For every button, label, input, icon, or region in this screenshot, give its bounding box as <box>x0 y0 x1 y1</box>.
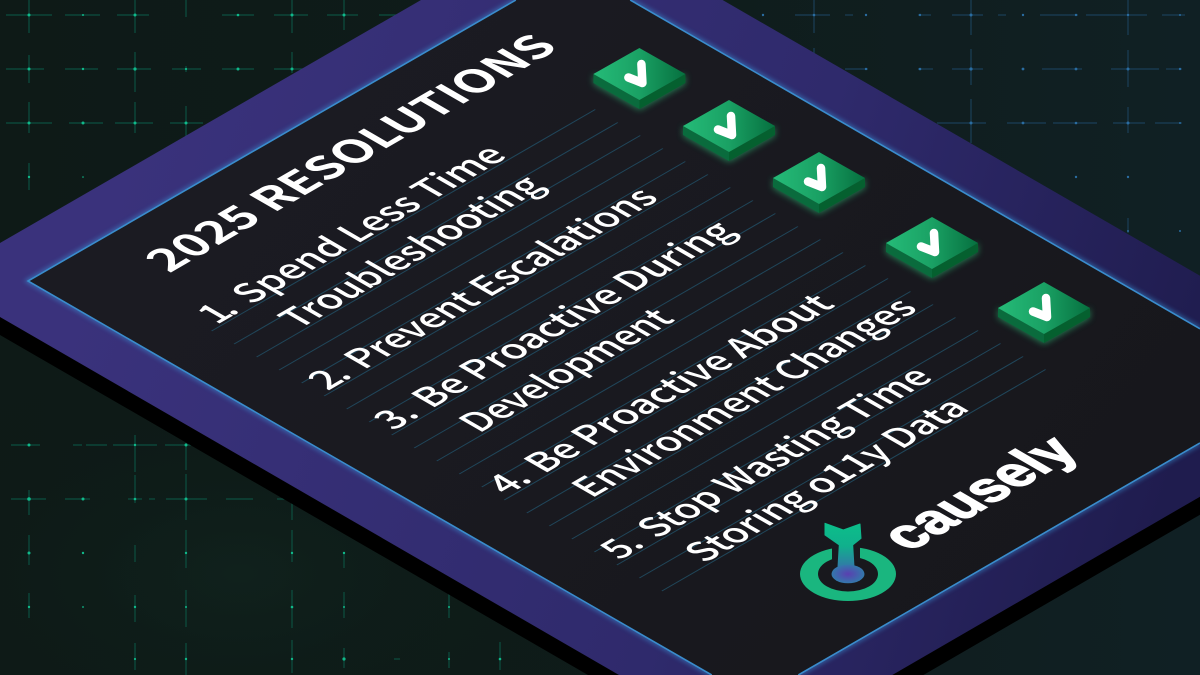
background grid: blue <box>762 0 1185 233</box>
item 3 line 2: Development <box>442 298 686 439</box>
guide lines <box>212 110 1046 591</box>
item 4 line 1: 4 <box>470 463 535 501</box>
icon: check box 1 <box>593 48 685 110</box>
item 1 line 1: 1 <box>180 293 245 331</box>
item 3 line 1: 3 <box>356 399 421 437</box>
title: 2025 RESOLUTIONS <box>125 22 571 280</box>
icon: check box 3 <box>773 152 865 214</box>
icon: check box 5 <box>998 282 1090 344</box>
icon: target and arrow <box>800 523 896 601</box>
item 1 line 1: . <box>194 289 251 322</box>
item 2: Prevent Escalations <box>327 177 670 376</box>
item 1 line 1: Spend Less Time <box>214 135 518 311</box>
item 4 line 1: Be Proactive About <box>507 284 846 480</box>
background grid: green <box>6 0 501 675</box>
wordmark: causely <box>865 427 1092 559</box>
text block: title and list <box>101 22 1088 593</box>
icon: check box 2 <box>683 100 775 162</box>
icon: check box 4 <box>886 217 978 279</box>
item 5 line 1: Stop Wasting Time <box>619 357 944 545</box>
item 5 line 1: . <box>600 523 656 556</box>
item 2: . <box>307 354 363 387</box>
item 2: 2 <box>290 359 355 397</box>
item 1 line 2: Troubleshooting <box>262 165 555 335</box>
item 3 line 1: Be Proactive During <box>394 211 747 415</box>
item 4 line 1: . <box>487 458 543 491</box>
logo: causely <box>800 427 1092 601</box>
item 4 line 2: Environment Changes <box>555 288 929 504</box>
item 5 line 2: Storing o11y Data <box>667 388 981 569</box>
item 5 line 1: 5 <box>582 528 647 566</box>
item 3 line 1: . <box>374 393 431 426</box>
